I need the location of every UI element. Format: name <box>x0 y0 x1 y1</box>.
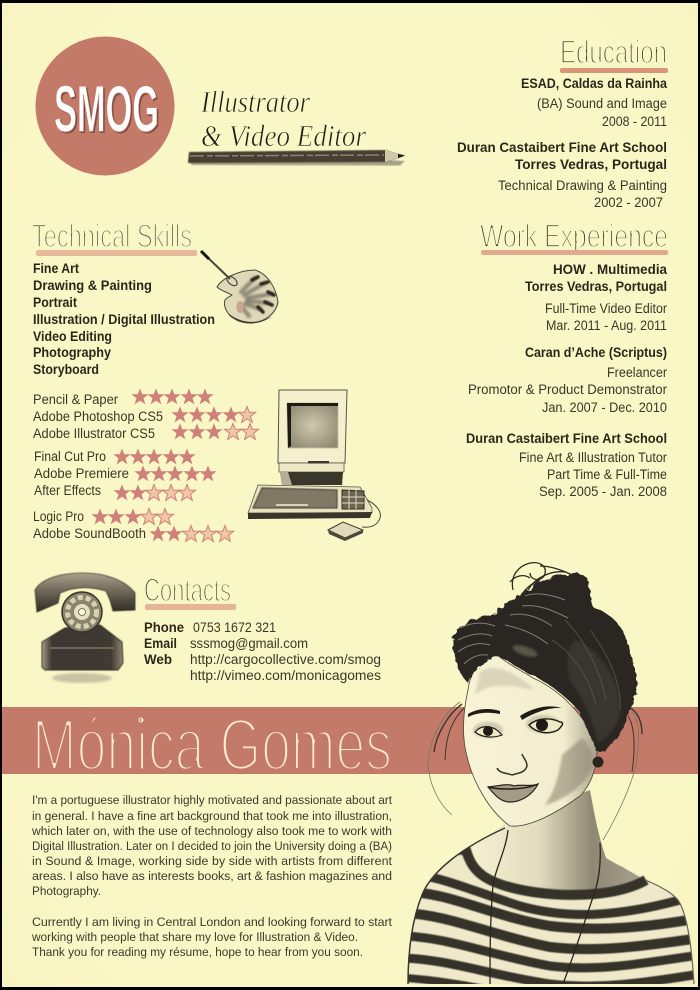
banner: name band <box>2 705 698 786</box>
heading: education: Education <box>560 34 667 70</box>
biography text: working with people that share my love for Illustration & Video. <box>31 930 358 944</box>
list: technical skills: Drawing & Painting <box>33 278 152 293</box>
tagline: illustrator and video editor: & Video Editor <box>201 118 367 153</box>
list: technical skills <box>33 261 215 377</box>
work experience list: Jan. 2007 - Dec. 2010 <box>542 400 667 415</box>
list: technical skills: Portrait <box>33 295 77 310</box>
work experience list: Promotor & Product Demonstrator <box>468 382 667 397</box>
portrait: earring <box>592 756 604 768</box>
work experience list: HOW . Multimedia <box>553 262 667 277</box>
ratings: graphics software: Adobe Illustrator CS5 <box>33 426 155 441</box>
icon: rotary telephone <box>35 573 135 683</box>
biography text: which later on, with the use of technology also took me to work with <box>31 824 392 838</box>
ratings: audio software <box>33 508 234 541</box>
work experience list: Torres Vedras, Portugal <box>525 279 667 294</box>
icon: paint palette <box>201 251 278 324</box>
work experience list: Freelancer <box>607 365 667 380</box>
portrait: lips <box>488 784 538 802</box>
work experience list: Mar. 2011 - Aug. 2011 <box>546 318 667 333</box>
contact details <box>144 620 381 683</box>
contact details: sssmog@gmail.com <box>190 636 308 651</box>
portrait: neck <box>470 790 645 892</box>
list: technical skills: Illustration / Digital Illustration <box>33 312 215 327</box>
ratings: video software <box>34 448 217 500</box>
contact details: http://vimeo.com/monicagomes <box>190 668 381 683</box>
contact details: Phone <box>144 620 184 635</box>
heading: technical skills: Technical Skills <box>32 218 192 254</box>
education list: 2008 - 2011 <box>602 114 667 129</box>
portrait: stray hair strands <box>428 702 642 840</box>
list: technical skills: Video Editing <box>33 329 112 344</box>
education list: 2002 - 2007 <box>594 195 663 210</box>
tagline: illustrator and video editor: Illustrator <box>200 84 311 119</box>
contact details: Web <box>144 652 172 667</box>
work experience list: Full-Time Video Editor <box>545 301 667 316</box>
ratings: graphics software: Adobe Photoshop CS5 <box>33 409 163 424</box>
ratings: audio software: Logic Pro <box>33 509 84 524</box>
ratings: audio software: Adobe SoundBooth <box>33 526 146 541</box>
ratings: graphics software <box>33 388 259 441</box>
portrait: nose <box>497 754 527 775</box>
portrait: striped shirt <box>400 828 700 990</box>
work experience list: Caran d’Ache (Scriptus) <box>525 345 667 360</box>
education list: (BA) Sound and Image <box>537 96 667 111</box>
education list <box>457 76 667 210</box>
ratings: graphics software: Pencil & Paper <box>33 392 118 407</box>
biography text: Photography. <box>32 884 101 898</box>
education list: Torres Vedras, Portugal <box>515 157 667 172</box>
ratings: video software: Adobe Premiere <box>34 466 129 481</box>
logo: SMOG circle <box>36 36 174 176</box>
biography text: in Sound & Image, working side by side with artists from different <box>32 854 393 868</box>
heading: contacts: Contacts <box>144 572 231 608</box>
list: technical skills: Storyboard <box>33 362 99 377</box>
ratings: video software: Final Cut Pro <box>34 449 106 464</box>
work experience list: Sep. 2005 - Jan. 2008 <box>539 484 667 499</box>
portrait: hair <box>453 563 638 753</box>
name title: Mónica Gomes <box>32 705 392 786</box>
portrait: face <box>464 655 597 826</box>
list: technical skills: Photography <box>33 345 111 360</box>
ratings: video software: After Effects <box>34 483 101 498</box>
biography text: I'm a portuguese illustrator highly motivated and passionate about art <box>32 793 393 807</box>
work experience list: Part Time & Full-Time <box>547 467 667 482</box>
logo: SMOG circle: SMOG <box>54 72 159 146</box>
contact details: Email <box>144 636 177 651</box>
contact details: 0753 1672 321 <box>193 620 276 635</box>
portrait: forehead and cheek shading <box>475 668 593 805</box>
work experience list <box>466 262 667 499</box>
icon: pencil <box>188 150 405 166</box>
list: technical skills: Fine Art <box>33 261 79 276</box>
ratings: software skills <box>33 388 259 541</box>
tagline: illustrator and video editor <box>200 84 367 153</box>
icon: computer <box>248 390 380 541</box>
work experience list: Duran Castaibert Fine Art School <box>466 431 667 446</box>
portrait: pencil drawing of Mónica <box>400 563 700 990</box>
logo: SMOG circle: SMOG <box>56 73 160 147</box>
education list: Technical Drawing & Painting <box>498 178 667 193</box>
biography text: areas. I also have as interests books, art & fashion magazines and <box>32 869 392 883</box>
biography text <box>31 793 393 959</box>
biography text: in general. I have a fine art background that took me into illustration, <box>32 809 392 823</box>
education list: ESAD, Caldas da Rainha <box>521 76 667 91</box>
contact details: http://cargocollective.com/smog <box>190 652 381 667</box>
portrait: brows and eyes <box>468 706 563 738</box>
work experience list: Fine Art & Illustration Tutor <box>519 450 667 465</box>
biography text: Digital Illustration. Later on I decided to join the University doing a (BA) <box>32 839 392 853</box>
biography text: Thank you for reading my résume, hope to hear from you soon. <box>32 945 363 959</box>
education list: Duran Castaibert Fine Art School <box>457 140 667 155</box>
portrait: necklace <box>490 830 600 984</box>
biography text: Currently I am living in Central London and looking forward to start <box>32 915 393 929</box>
